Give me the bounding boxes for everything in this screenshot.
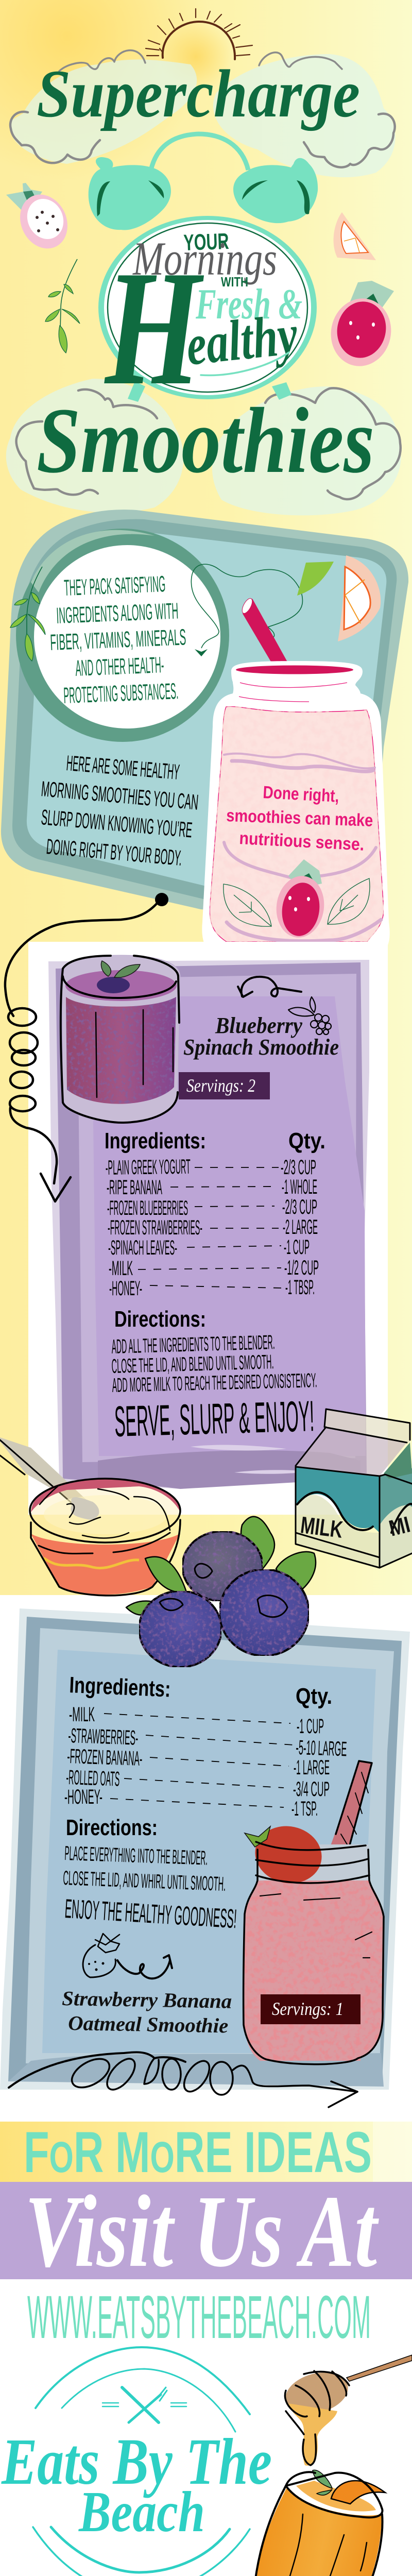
ingredients heading: Ingredients: [105,1128,206,1154]
recipe title [183,1013,339,1060]
servings label [179,1072,270,1099]
ingredient rows: -1 LARGE [294,1756,330,1779]
ingredient rows: -FROZEN BLUEBERRIES [107,1197,188,1219]
ingredient rows: -HONEY- [64,1786,102,1808]
intro panel: tray [1,510,408,948]
recipe panel: blueberry spinach smoothie: -2/3 CUP [282,1196,317,1218]
jar text: smoothies can make [226,806,373,831]
yogurt bowl with spoon [0,1437,180,1596]
herb sprig on circle [10,567,45,661]
directions text [63,1842,226,1895]
orange slice small [334,212,376,260]
straw [240,597,289,665]
ingredient rows [106,1156,319,1300]
milk label: MILK [299,1511,345,1543]
clock text: with: WITH [221,274,248,290]
dashed leaders [104,1714,294,1807]
blueberries [126,1517,316,1667]
ingredients heading: Ingredients: [69,1672,171,1702]
connector cord with arrow: tray to blueberry recipe [5,893,168,1201]
logo name: Beach [78,2480,205,2544]
herb sprig [45,259,80,353]
smoothie fill [210,706,384,942]
clouds [6,54,401,515]
spiral arrow under blue recipe card [9,2052,357,2107]
strawberry icon with arrow [83,1934,172,1978]
lower intro text [40,751,199,870]
hero: title and alarm clock [6,9,401,515]
circle callout: FIBER, VITAMINS, MINERALS [49,624,186,655]
pale strawberry [6,183,76,257]
logo name [1,2425,272,2544]
clock bells [89,157,318,230]
ingredient rows: -RIPE BANANA [107,1176,162,1199]
ingredient rows: -1 TSP. [291,1798,318,1820]
intro panel: tray: HERE ARE SOME HEALTHY [65,751,180,784]
clock text: Your: YOUR [183,229,229,256]
ingredient rows: -3/4 CUP [293,1778,330,1801]
recipe panel: blueberry spinach smoothie: -1/2 CUP [284,1257,319,1279]
jar text [226,783,373,855]
circle callout [16,529,229,742]
orange slice [338,555,381,641]
clock text: Mornings: Mornings [132,232,277,285]
milk carton [296,1409,412,1568]
recipe title: Strawberry Banana [62,1987,232,2013]
underline swoosh [201,352,289,376]
recipe panel: blueberry spinach smoothie: -2 LARGE [283,1216,318,1239]
callout text [49,571,186,708]
sun [146,9,252,59]
strawberry [272,859,328,941]
ingredient rows: -1 CUP [284,1236,310,1259]
clock text: ealthy: ealthy [183,302,301,378]
clock body [98,216,317,399]
ingredient rows: -HONEY- [109,1277,142,1300]
heading: Supercharge: Supercharge [37,56,360,131]
berry left [139,1591,221,1667]
directions heading: Directions: [66,1815,158,1840]
blue recipe card: strawberry banana oatmeal smoothie [0,1608,410,2090]
arrowhead [195,649,208,656]
recipe panel: blueberry spinach smoothie [48,955,369,1489]
straw [314,1761,372,1891]
jar text: nutritious sense. [239,828,365,855]
intro panel: tray: DOING RIGHT BY YOUR BODY. [45,834,183,870]
brush waves [224,754,381,941]
curly arrow [238,977,301,997]
clock text: Fresh &: Fresh & [195,280,302,328]
recipe title: Blueberry [215,1013,302,1038]
circle callout: THEY PACK SATISFYING [63,571,166,601]
intro panel: tray: SLURP DOWN KNOWING YOU’RE [40,805,193,842]
mason jar [244,1820,384,2064]
ingredient rows: -FROZEN STRAWBERRIES- [108,1216,202,1239]
dashed leaders [138,1167,281,1288]
alarm clock [89,134,318,419]
leaf outlines [224,878,370,926]
recipe title: Oatmeal Smoothie [68,2011,229,2037]
white card behind blueberry recipe [28,942,388,1515]
blackberry and mint [97,961,140,993]
ingredient rows: -1 CUP [297,1715,324,1738]
ingredient rows: -MILK [69,1703,95,1726]
ingredient rows [64,1703,347,1820]
ingredient rows: -STRAWBERRIES- [68,1724,139,1750]
recipe panel: blueberry spinach smoothie: -2/3 CUP [281,1156,316,1179]
recipe title [62,1987,232,2037]
ingredient rows: -SPINACH LEAVES- [108,1236,177,1259]
logo name: Eats By The [1,2425,272,2498]
servings label [261,1994,360,2024]
servings label: Servings: 1 [272,1998,344,2019]
smoothie glass [61,955,180,1123]
knife and fork [102,2387,186,2422]
quantity heading: Qty. [288,1128,325,1154]
logo: eats by the beach [1,2347,272,2576]
berry back [182,1531,263,1601]
jar text: Done right, [263,783,339,806]
recipe panel: blueberry spinach smoothie: -1 WHOLE [282,1176,317,1198]
leaves [126,1517,316,1615]
circle callout: INGREDIENTS ALONG WITH [56,599,179,629]
circle callout: AND OTHER HEALTH- [75,652,164,681]
circle callout: PROTECTING SUBSTANCES. [63,679,179,708]
logo rings [33,2347,250,2576]
clock handle [151,134,248,170]
ingredient rows: -PLAIN GREEK YOGURT [106,1156,191,1179]
orange smoothie glass [254,2470,385,2576]
honey dipper [281,2355,412,2466]
recipe title: Spinach Smoothie [183,1035,339,1060]
recipe panel: blueberry spinach smoothie: -1 TBSP. [285,1276,315,1299]
directions text [111,1331,317,1397]
pink jar [202,597,390,948]
ingredient rows: -MILK [109,1257,133,1280]
ingredient rows: -ROLLED OATS [66,1766,120,1791]
red strawberry [325,281,397,372]
clock text: H: H [103,237,205,419]
cloud outlines [10,50,401,499]
intro panel: tray: MORNING SMOOTHIES YOU CAN [40,776,199,815]
looping string [191,564,302,648]
quantity heading: Qty. [296,1684,332,1709]
berry right [219,1569,309,1656]
blackberry icon [288,997,331,1035]
servings label: Servings: 2 [186,1075,255,1096]
ingredient rows: -FROZEN BANANA- [67,1745,143,1770]
green leaf [297,562,334,596]
directions heading: Directions: [114,1307,206,1332]
